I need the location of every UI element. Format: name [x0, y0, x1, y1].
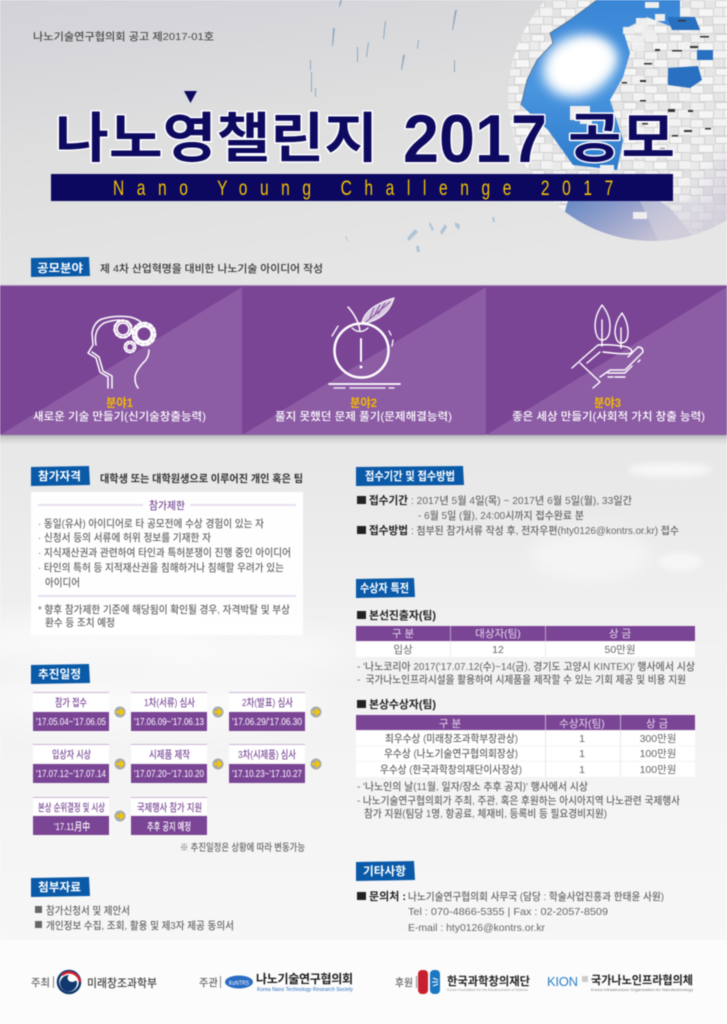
step: 국제행사 참가 지원: [131, 797, 207, 835]
contact information: E-mail : hty0126@kontrs.or.kr: [408, 922, 545, 934]
band shadow: [0, 435, 727, 447]
field 3 text: 좋은 세상 만들기(사회적 가치 창출 능력): [512, 410, 705, 423]
main award notes: [357, 780, 680, 820]
section: 기타사항 heading: 기타사항: [363, 864, 406, 878]
main award table: 300만원: [640, 733, 676, 745]
footer logo: 주관 나노기술연구협의회: Korea Nano Technology Research Society: [257, 987, 354, 993]
step: 본상 순위결정 및 시상: 본상 순위결정 및 시상: [38, 801, 105, 814]
footer logo: KION 국가나노인프라협의체: 국가나노인프라협의체: [591, 973, 693, 987]
finalist prizes table: 50만원: [604, 644, 636, 656]
footer logo: 주최 미래창조과학부: 주최: [31, 976, 50, 989]
section: 수상자 특전 heading: [356, 578, 415, 598]
rim line of continent: [521, 0, 597, 105]
contact information: Tel : 070-4866-5355 | Fax : 02-2057-8509: [408, 906, 608, 918]
panel: participation restrictions: 참가제한: [149, 500, 185, 512]
finalist prizes table: 대상자(팀): [475, 628, 521, 640]
step: 본상 순위결정 및 시상: [33, 797, 109, 835]
step: 시제품 제작: 시제품 제작: [149, 749, 190, 761]
finalist prizes table: 본선진출자(팀): [369, 609, 436, 622]
main award table: 1: [579, 748, 585, 760]
footer logo: 주최 미래창조과학부: 미래창조과학부: [87, 977, 157, 990]
contact information: [357, 890, 664, 934]
loose tiles: [570, 2, 665, 219]
schedule footnote: ※ 추진일정은 상황에 따라 변동가능: [180, 841, 305, 854]
lavender limb, lower right only: [686, 154, 727, 235]
step: 2차 심사: [229, 692, 305, 731]
step: 참가 접수: 참가 접수: [55, 696, 87, 709]
subtitle bar: Nano Young Challenge 2017: [113, 176, 613, 200]
main award table: 수상자(팀): [559, 718, 605, 730]
field 1 text: 분야1: [106, 396, 133, 410]
section: 공모분야 heading: [31, 257, 323, 277]
bright highlight: [533, 24, 623, 108]
icon: apple with exclamation mark: [329, 298, 400, 388]
panel: participation restrictions: 아이디어: [45, 577, 80, 589]
finalist prizes table: [356, 609, 695, 657]
title: 공모: [568, 109, 675, 169]
application period and method: : 첨부된 참가서류 작성 후, 전자우편(hty0126@kontrs.or.kr) 접수: [411, 524, 679, 537]
footer logo: 주관 나노기술연구협의회: 주관: [199, 977, 218, 989]
finalist notes: - 국가나노인프라시설을 활용하여 시제품을 제작할 수 있는 기회 제공 및 비용 지원: [357, 673, 686, 686]
application period and method: : 2017년 5월 4일(목) ~ 2017년 6월 5일(월), 33일간: [411, 494, 632, 507]
step: 국제행사 참가 지원: 국제행사 참가 지원: [137, 801, 202, 814]
section: 첨부자료 heading: [31, 877, 90, 897]
panel: participation restrictions: [31, 492, 303, 635]
main award table: 본상수상자(팀): [369, 698, 436, 711]
section: 기타사항 heading: [356, 861, 415, 881]
attachments list: [35, 905, 234, 932]
field 2 text: [275, 396, 452, 423]
finalist prizes table: 입상: [393, 643, 413, 656]
field 3 text: 분야3: [594, 396, 621, 410]
field 1 text: 새로운 기술 만들기(신기술창출능력): [33, 410, 206, 423]
attachments list: 개인정보 수집, 조회, 활용 및 제3자 제공 동의서: [46, 919, 234, 932]
finalist prizes table: 12: [492, 644, 504, 656]
footer logo: 후원 한국과학창의재단: 한국과학창의재단: [447, 974, 530, 988]
application period and method: 접수기간: [369, 493, 408, 507]
footer logo: KION 국가나노인프라협의체: [547, 973, 693, 992]
icon: head with gears: [88, 316, 155, 388]
section: 공모분야 heading: 제 4차 산업혁명을 대비한 나노기술 아이디어 작성: [100, 262, 323, 275]
step: 2차 심사: 2차(발표) 심사: [242, 697, 293, 709]
field 3 text: [512, 396, 705, 423]
ocean: [521, 0, 680, 170]
section: 참가자격 heading: [31, 466, 303, 486]
section: 수상자 특전 heading: 수상자 특전: [360, 582, 409, 595]
footer logo: KION 국가나노인프라협의체: Korea Infrastructure Organization for Nanotechnology: [591, 987, 693, 992]
main award table: 1: [579, 764, 585, 776]
step: 참가 접수: '17.05.04~'17.06.05: [36, 716, 106, 728]
dark tile gaps: [622, 20, 711, 150]
step: 3차 심사: 3차(시제품) 심사: [238, 749, 296, 761]
section: 공모분야 heading: 공모분야: [37, 261, 83, 275]
panel: participation restrictions: · 지식재산권과 관련하여 타인과 특허분쟁이 진행 중인 아이디어: [38, 546, 291, 559]
footer logo: 후원 한국과학창의재단: [395, 970, 530, 994]
main award notes: - '나노인의 날(11월, 일자/장소 추후 공지)' 행사에서 시상: [357, 780, 588, 793]
section: 접수기간 및 접수방법 heading: 접수기간 및 접수방법: [365, 469, 455, 483]
section: 첨부자료 heading: 첨부자료: [38, 880, 81, 894]
main award table: [356, 698, 695, 777]
finalist notes: - '나노코리아 2017('17.07.12(수)~14(금), 경기도 고양시 KINTEX)' 행사에서 시상: [357, 660, 695, 673]
step: 본상 순위결정 및 시상: '17.11月中: [54, 820, 90, 833]
title: [55, 91, 675, 177]
field 2 text: 분야2: [350, 396, 377, 410]
step: 입상자 시상: '17.07.12~'17.07.14: [36, 768, 106, 780]
footer logo: 후원 한국과학창의재단: Korea Foundation for the Advancement of Science: [447, 987, 529, 992]
step: 시제품 제작: '17.07.20~'17.10.20: [134, 768, 204, 780]
finalist prizes table: 상 금: [609, 628, 631, 640]
step: 2차 심사: '17.06.29/'17.06.30: [232, 716, 302, 728]
finalist prizes table: 구 분: [392, 628, 414, 640]
field 1 text: [33, 396, 206, 423]
attachments list: 참가신청서 및 제안서: [46, 905, 130, 917]
main award table: 상 금: [646, 718, 668, 730]
main award table: 우수상 (나노기술연구협의회장상): [384, 747, 518, 760]
footer logo: 주관 나노기술연구협의회: [199, 971, 354, 993]
step: 국제행사 참가 지원: 추후 공지 예정: [147, 821, 191, 833]
step: 1차 심사: [131, 692, 207, 731]
footer logo: 후원 한국과학창의재단: 후원: [395, 976, 413, 989]
main award table: 100만원: [640, 764, 676, 776]
main award table: 구 분: [439, 718, 461, 730]
schedule flow: [33, 692, 322, 835]
panel: participation restrictions: * 향후 참가제한 기준에 해당됨이 확인될 경우, 자격박탈 및 부상: [38, 603, 290, 616]
footer logo: 주관 나노기술연구협의회: KoNTRS: [229, 980, 250, 987]
section: 참가자격 heading: 참가자격: [38, 469, 81, 483]
application period and method: 접수방법: [369, 524, 408, 537]
panel: fields band: [0, 285, 727, 435]
section: 접수기간 및 접수방법 heading: [356, 466, 464, 486]
globe graphic: [508, 0, 727, 245]
step: 3차 심사: '17.10.23~'17.10.27: [232, 768, 302, 780]
main award notes: - 나노기술연구협의회가 주최, 주관, 혹은 후원하는 아시아지역 나노관련 국제행사: [357, 794, 680, 807]
icon: hand holding sprouts: [572, 305, 643, 388]
footer logo: 주관 나노기술연구협의회: 나노기술연구협의회: [256, 971, 353, 986]
step: 1차 심사: 1차(서류) 심사: [144, 697, 195, 709]
application period and method: [357, 493, 679, 537]
main award table: 우수상 (한국과학창의재단이사장상): [380, 763, 522, 776]
step: 입상자 시상: [33, 744, 109, 783]
title: 나노영챌린지: [55, 109, 378, 169]
title: 2017: [403, 101, 547, 177]
section: 추진일정 heading: [31, 664, 90, 684]
contact information: 문의처 :: [369, 890, 406, 903]
contact information: 나노기술연구협의회 사무국 (담당 : 학술사업진흥과 한태윤 사원): [408, 890, 664, 903]
main award notes: 참가 지원(팀당 1명, 항공료, 체재비, 등록비 등 필요경비지원): [364, 807, 607, 820]
ocean holes: [667, 17, 713, 88]
application period and method: - 6월 5일 (월), 24:00시까지 접수완료 분: [418, 509, 584, 522]
finalist notes: [357, 660, 695, 686]
step: 입상자 시상: 입상자 시상: [52, 748, 91, 761]
field 2 text: 풀지 못했던 문제 풀기(문제해결능력): [275, 410, 452, 423]
step: 1차 심사: '17.06.09~'17.06.13: [134, 716, 204, 728]
falling particles: [310, 0, 495, 252]
panel: participation restrictions: · 타인의 특허 등 지적재산권을 침해하거나 침해할 우려가 있는: [38, 561, 284, 574]
main award table: 100만원: [640, 748, 676, 760]
arrows between steps: [114, 706, 322, 822]
step: 시제품 제작: [131, 744, 207, 783]
main award table: 최우수상 (미래창조과학부장관상): [385, 732, 518, 745]
step: 참가 접수: [33, 692, 109, 731]
main award table: 1: [579, 733, 585, 745]
panel: participation restrictions: 환수 등 조치 예정: [45, 616, 115, 629]
section: 참가자격 heading: 대학생 또는 대학원생으로 이루어진 개인 혹은 팀: [100, 472, 303, 485]
notice number: 나노기술연구협의회 공고 제2017-01호: [33, 30, 214, 43]
section: 추진일정 heading: 추진일정: [38, 667, 81, 681]
footer logo: 주최 미래창조과학부: [31, 971, 157, 993]
panel: participation restrictions: · 동일(유사) 아이디어로 타 공모전에 수상 경험이 있는 자: [38, 517, 264, 530]
panel: participation restrictions: · 신청서 등의 서류에 허위 정보를 기재한 자: [38, 531, 211, 544]
step: 3차 심사: [229, 744, 305, 783]
footer logo: KION 국가나노인프라협의체: KION: [547, 974, 578, 989]
